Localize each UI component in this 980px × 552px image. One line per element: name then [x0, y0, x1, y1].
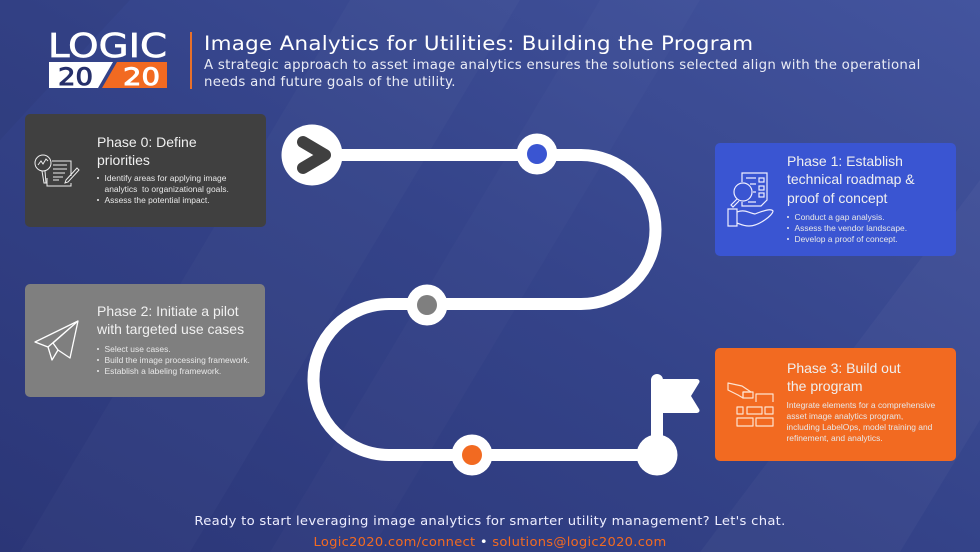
phase 2 heading: Phase 2: Initiate a pilot [97, 303, 239, 319]
call to action: Ready to start leveraging image analytics for smarter utility management? Let's chat. [194, 513, 786, 528]
panel: phase 1 [715, 143, 956, 256]
phase 2 heading [97, 303, 244, 337]
icon: magnifier document and hand [727, 172, 774, 227]
phase 3 body: refinement, and analytics. [786, 433, 883, 443]
phase 0 heading: Phase 0: Define [97, 134, 197, 150]
title: Image Analytics for Utilities: Building the Program [204, 32, 753, 54]
subtitle: A strategic approach to asset image analytics ensures the solutions selected align with the operational [204, 58, 921, 73]
phase 3 heading: Phase 3: Build out [787, 360, 901, 376]
phase 1 heading: proof of concept [787, 190, 887, 206]
phase 1 bullets: Conduct a gap analysis. [794, 212, 885, 222]
phase 1 bullets: Assess the vendor landscape. [794, 222, 907, 232]
panel: phase 0 [25, 114, 266, 227]
icon: paper plane [34, 320, 79, 361]
phase 0 heading: priorities [97, 152, 150, 168]
phase 2 bullets [97, 344, 250, 376]
phase 0 bullets: analytics to organizational goals. [104, 184, 229, 194]
phase 1 bullets [787, 212, 907, 244]
phase 0 bullets: Identify areas for applying image [104, 172, 226, 182]
phase 2 marker [406, 284, 448, 326]
phase 3 body: Integrate elements for a comprehensive [786, 400, 935, 410]
phase 1 heading [787, 153, 915, 206]
phase 2 bullets: Select use cases. [104, 344, 171, 354]
phase 1 bullets: Develop a proof of concept. [794, 234, 898, 244]
icon: analytics document [34, 154, 80, 186]
phase 3 body: asset image analytics program, [786, 411, 903, 421]
header divider [190, 32, 192, 89]
start marker [282, 124, 342, 186]
phase 2 heading: with targeted use cases [97, 321, 244, 337]
phase 0 bullets: Assess the potential impact. [104, 194, 210, 204]
phase 3 heading: the program [787, 378, 862, 394]
phase 1 heading: Phase 1: Establish [787, 153, 903, 169]
phase 3 body: including LabelOps, model training and [786, 422, 932, 432]
phase 2 bullets: Establish a labeling framework. [104, 366, 221, 376]
logo 20/20 badge [49, 62, 167, 91]
subtitle: needs and future goals of the utility. [204, 74, 456, 90]
phase 3 heading [787, 360, 901, 394]
contact links: Logic2020.com/connect • solutions@logic2020.com [314, 534, 666, 549]
phase 3 marker [452, 434, 492, 476]
finish flag [636, 374, 700, 476]
phase 0 bullets [97, 172, 229, 204]
icon: hand placing bricks [727, 382, 774, 427]
panel: phase 2 [25, 284, 265, 397]
phase 0 heading [97, 134, 197, 168]
subtitle [204, 58, 921, 90]
phase 1 marker [516, 134, 558, 174]
phase 2 bullets: Build the image processing framework. [104, 354, 250, 364]
route line [312, 155, 657, 455]
phase 3 body [786, 400, 935, 443]
logo [48, 32, 167, 89]
phase 1 heading: technical roadmap & [787, 171, 915, 187]
panel: phase 3 [715, 348, 956, 461]
